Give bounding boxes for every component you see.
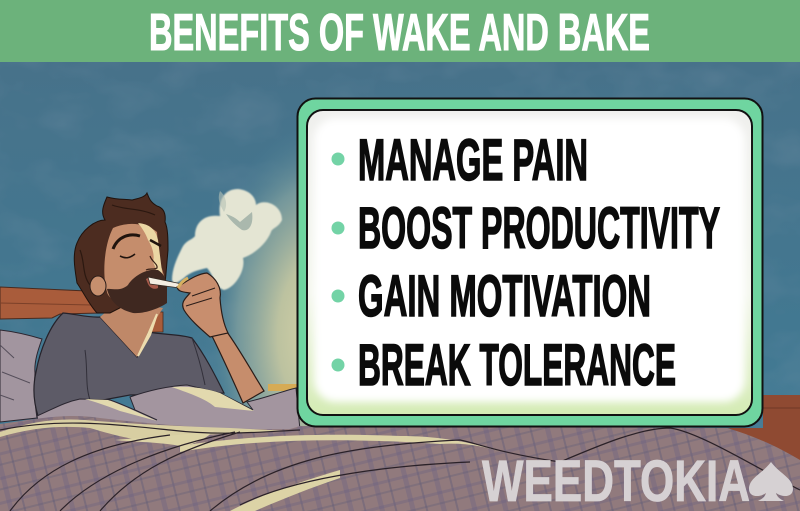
face <box>104 224 165 310</box>
blanket fold lines <box>0 423 800 511</box>
panel soft white centre <box>314 118 745 402</box>
headboard left <box>0 287 100 319</box>
sheet highlights <box>172 387 254 411</box>
headboard right <box>728 395 800 462</box>
pillow <box>0 330 42 422</box>
panel frame <box>298 98 762 426</box>
panel: benefits list <box>298 98 762 426</box>
eyebrow <box>113 235 140 249</box>
watermark: WeedTokia logo <box>482 449 793 511</box>
plaid blanket <box>0 416 800 511</box>
closed eye <box>120 254 135 258</box>
bedside table <box>268 384 298 391</box>
title bar <box>0 0 800 62</box>
smoke <box>172 189 282 290</box>
white sheet folds <box>37 385 300 432</box>
bullet: manage pain <box>332 128 588 193</box>
joint <box>148 277 182 288</box>
hair: messy brown <box>74 193 168 313</box>
blanket tan highlights <box>0 420 290 441</box>
neck <box>100 300 163 357</box>
icon: spade <box>749 462 793 501</box>
bullet: gain motivation <box>332 264 651 329</box>
face highlight <box>138 223 165 295</box>
panel inner card <box>307 110 752 415</box>
bullet: break tolerance <box>332 333 676 398</box>
lips <box>146 278 158 289</box>
smoke shadow <box>226 212 252 230</box>
beard <box>107 270 167 313</box>
arm <box>211 332 264 403</box>
bullet: manage pain: MANAGE PAIN <box>358 128 588 193</box>
shirt <box>34 313 224 416</box>
nose <box>146 256 157 270</box>
ear <box>90 276 106 296</box>
hand <box>177 273 228 337</box>
